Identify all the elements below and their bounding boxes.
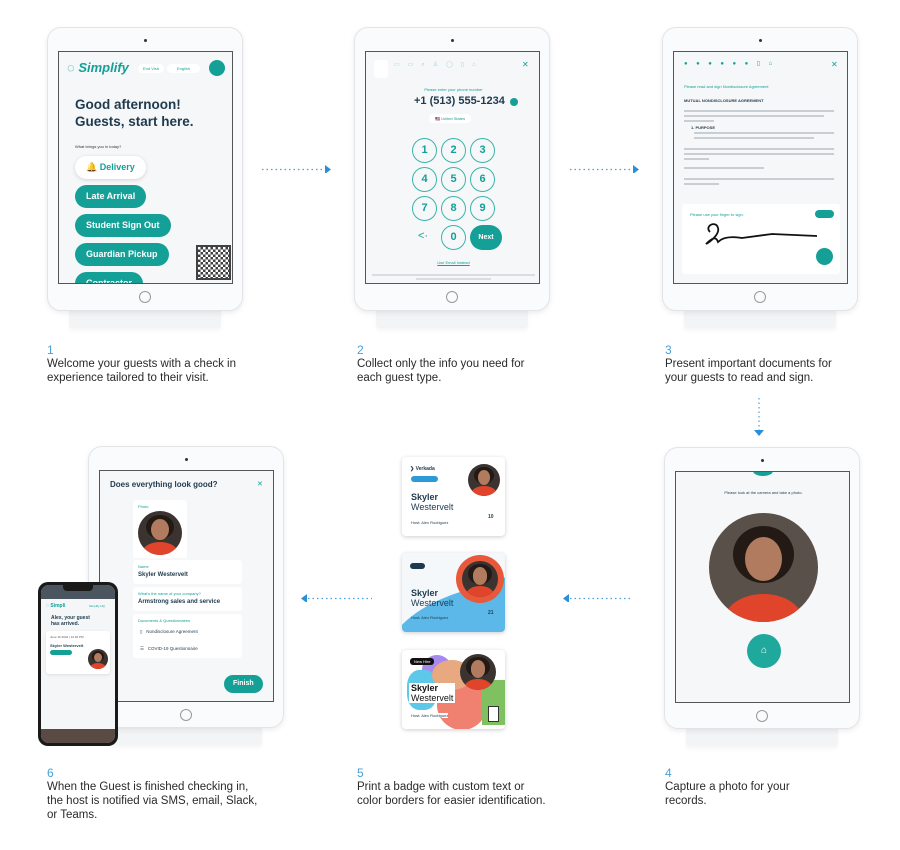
tablet 6: review screen with phone notification: Skyler Westervelt xyxy=(138,572,188,578)
tablet 6: review screen with phone notification: Does everything look good? xyxy=(110,480,218,489)
badge: interview: Skyler xyxy=(411,492,438,502)
tablet 6: review screen with phone notification: ✕ xyxy=(257,481,263,488)
greeting: Guests, start here. xyxy=(75,114,194,129)
phone: June 16 2022 | 12:36 PM xyxy=(50,635,83,639)
photo xyxy=(709,513,818,622)
qr code xyxy=(196,245,231,280)
tablet 2: phone number: 4 xyxy=(421,173,428,185)
tablet 3: document signing: 1. PURPOSE xyxy=(691,125,715,130)
tablet 2: phone number: 7 xyxy=(421,202,428,214)
arrow 3 down to 4 xyxy=(754,398,764,436)
caption 6: When the Guest is finished checking in, xyxy=(47,781,248,793)
caption 2: 2 xyxy=(357,343,364,357)
tablet 2: phone number: 2 xyxy=(450,144,457,156)
caption 3: your guests to read and sign. xyxy=(665,372,813,384)
caption 4 xyxy=(665,766,790,807)
badges xyxy=(400,456,507,732)
tablet 1: welcome screen: Late Arrival xyxy=(86,191,135,201)
tablet 1: welcome screen: Student Sign Out xyxy=(86,220,160,230)
phone: ◌ Simpli xyxy=(46,603,65,609)
badge: VIP xyxy=(402,553,505,632)
tablet 2: phone number xyxy=(354,27,550,328)
photo card xyxy=(133,500,187,558)
greeting: Good afternoon! xyxy=(75,97,181,112)
tablet 6: review screen with phone notification: ▯ Nondisclosure Agreement xyxy=(140,629,198,634)
caption 6: 6 xyxy=(47,766,54,780)
caption 1: Welcome your guests with a check in xyxy=(47,358,236,370)
caption 1: 1 xyxy=(47,343,54,357)
badge: VIP: Westervelt xyxy=(411,598,453,608)
tablet 1: welcome screen: What brings you in today? xyxy=(75,144,121,149)
phone: Simplify HQ xyxy=(89,604,105,608)
badge: new hire: New Hire xyxy=(414,659,430,664)
tablet 6: review screen with phone notification: What's the name of your company? xyxy=(138,591,201,596)
badge: new hire: Host: Alex Rodriguez xyxy=(411,713,448,718)
tablet 2: phone number: 9 xyxy=(479,202,486,214)
tablet 6: review screen with phone notification: Armstrong sales and service xyxy=(138,599,220,605)
caption 4: 4 xyxy=(665,766,672,780)
tablet 2: phone number: Use Email Instead xyxy=(437,260,470,265)
logo: ◌ Simplify xyxy=(67,60,129,75)
badge: new hire: Skyler xyxy=(411,683,438,693)
tablet 2: phone number: 🇺🇸 United States xyxy=(435,116,465,121)
camera button xyxy=(747,634,781,668)
caption 1 xyxy=(47,343,236,384)
caption 3: 3 xyxy=(665,343,672,357)
tablet 4: photo capture: Please look at the camera and take a photo. xyxy=(724,490,803,495)
phone number: +1 (513) 555-1234 xyxy=(414,95,505,107)
signature pad xyxy=(682,204,840,274)
tablet 6: review screen with phone notification: Documents & Questionnaires xyxy=(138,618,190,623)
tablet 4: photo capture xyxy=(664,447,860,746)
arrow 1 to 2 xyxy=(262,165,331,173)
arrow 5 to 6 xyxy=(301,594,372,602)
tablet 2: phone number: 3 xyxy=(479,144,486,156)
greeting xyxy=(75,97,194,129)
caption 4: Capture a photo for your xyxy=(665,781,790,793)
tablet 2: phone number: Next xyxy=(478,234,494,241)
phone: Skyler Westervelt xyxy=(50,643,83,648)
badge: VIP: 21 xyxy=(488,610,494,616)
caption 6 xyxy=(47,766,257,821)
signature pad: Please use your finger to sign. xyxy=(690,212,744,217)
tablet 2: phone number: ▭▭⌕♙◯▯⌂ xyxy=(394,62,484,68)
tablet 1: welcome screen xyxy=(46,27,244,328)
caption 1: experience tailored to their visit. xyxy=(47,372,209,384)
tablet 3: document signing: MUTUAL NONDISCLOSURE AGREEMENT xyxy=(684,98,764,103)
caption 6: or Teams. xyxy=(47,809,97,821)
phone: Alex, your guest xyxy=(51,615,90,621)
tablet 2: phone number: <· xyxy=(418,230,428,242)
tablet 2: phone number: 8 xyxy=(450,202,457,214)
tablet 1: welcome screen: Guardian Pickup xyxy=(86,249,158,259)
tablet 6: review screen with phone notification xyxy=(38,446,284,746)
badge: interview: ❯ Verkada xyxy=(410,466,435,472)
tablet 3: document signing: Please read and sign Nondisclosure Agreement xyxy=(684,84,768,89)
tablet 2: phone number: 6 xyxy=(479,173,486,185)
keypad: 1 xyxy=(421,144,428,156)
arrow 4 to 5 xyxy=(563,594,630,602)
tablet 1: welcome screen: 🔔 Delivery xyxy=(86,162,135,172)
tablet 1: welcome screen: English xyxy=(177,66,190,71)
caption 5: Print a badge with custom text or xyxy=(357,781,524,793)
caption 2: each guest type. xyxy=(357,372,441,384)
tablet 2: phone number: 5 xyxy=(450,173,457,185)
badge: interview: Westervelt xyxy=(411,502,453,512)
badge: VIP: Skyler xyxy=(411,588,438,598)
tablet 1: welcome screen: End Visit xyxy=(143,66,159,71)
tablet 2: phone number: Please enter your phone number xyxy=(424,87,483,92)
caption 5 xyxy=(357,766,546,807)
tablet 3: document signing xyxy=(662,27,858,328)
caption 6: the host is notified via SMS, email, Slack, xyxy=(47,795,257,807)
tablet 6: review screen with phone notification: Name xyxy=(138,564,149,569)
tablet 3: document signing: ✕ xyxy=(831,60,838,69)
camera button: ⌂ xyxy=(761,645,767,656)
badge: interview: Host: Alex Rodriguez xyxy=(411,520,448,525)
phone: has arrived. xyxy=(51,621,79,627)
tablet 3: document signing: ●●●●●●▯⌂ xyxy=(684,61,781,67)
arrow 2 to 3 xyxy=(570,165,639,173)
caption 5: color borders for easier identification. xyxy=(357,795,546,807)
caption 3: Present important documents for xyxy=(665,358,832,370)
badge: interview: 10 xyxy=(488,514,494,520)
photo card: Photo xyxy=(138,504,148,509)
caption 2 xyxy=(357,343,524,384)
badge: VIP: Host: Alex Rodriguez xyxy=(411,615,448,620)
caption 5: 5 xyxy=(357,766,364,780)
tablet 6: review screen with phone notification: Finish xyxy=(233,680,254,687)
badge: new hire: Westervelt xyxy=(411,693,453,703)
caption 3 xyxy=(665,343,832,384)
badge: interview xyxy=(402,457,505,536)
tablet 2: phone number: ✕ xyxy=(522,60,529,69)
phone xyxy=(38,582,118,746)
caption 2: Collect only the info you need for xyxy=(357,358,524,370)
caption 4: records. xyxy=(665,795,707,807)
keypad xyxy=(412,138,437,163)
tablet 2: phone number: 0 xyxy=(450,231,457,243)
tablet 6: review screen with phone notification: ☰ COVID-19 Questionnaire xyxy=(140,646,198,651)
badge: new hire xyxy=(402,650,505,729)
